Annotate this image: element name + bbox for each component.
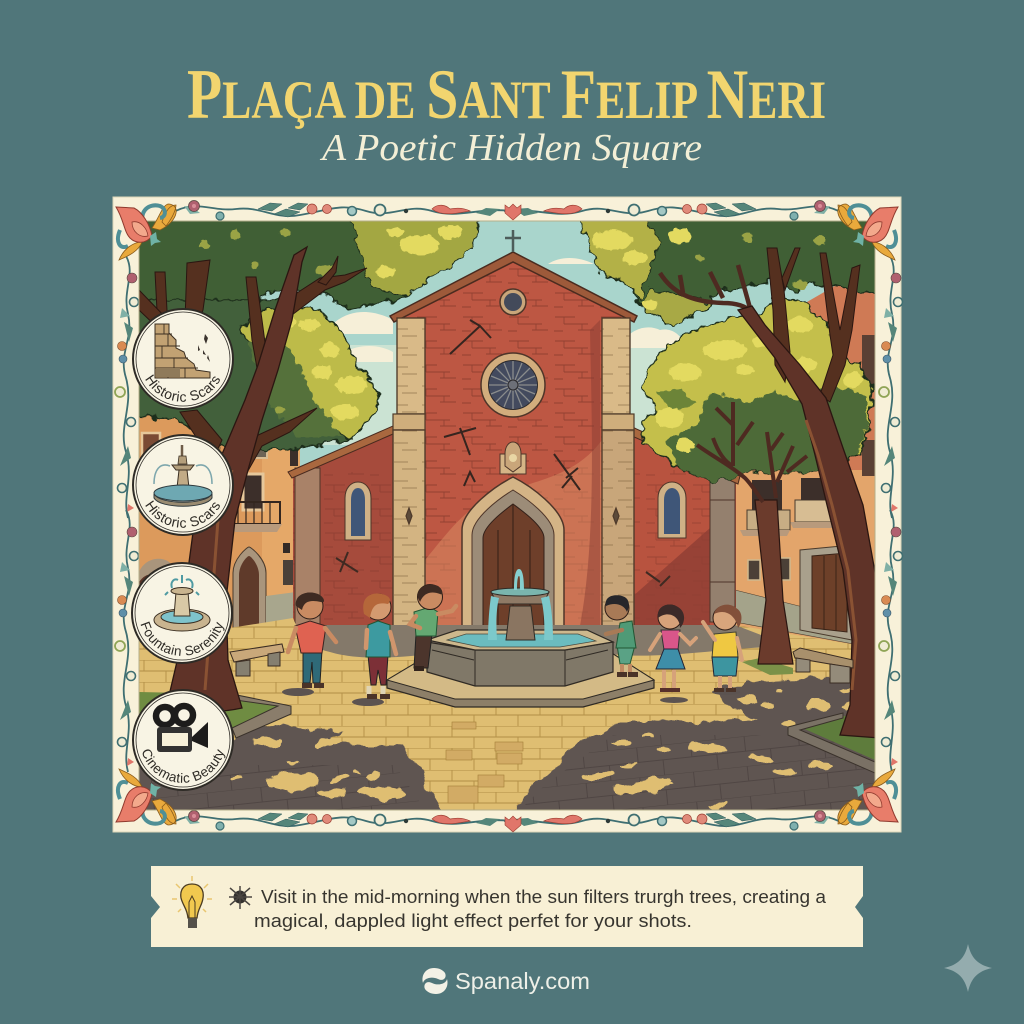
church: crest — [500, 442, 526, 474]
label: cinematic beauty: Cinematic Beauty — [142, 749, 226, 783]
brand: Spanaly — [422, 968, 590, 994]
child: green shirt — [410, 584, 456, 671]
church — [288, 230, 740, 626]
child: teal shirt — [352, 594, 396, 706]
medallion: fountain one — [132, 434, 234, 536]
icon: movie camera — [156, 706, 208, 752]
church: wall scars — [444, 320, 580, 490]
medallion: historic scars — [132, 308, 234, 410]
canopy: top left dark — [140, 222, 480, 310]
medallion: cinematic beauty — [132, 689, 234, 791]
buildings: left — [139, 415, 300, 640]
child: yellow shirt — [703, 605, 742, 695]
child: red shirt — [282, 592, 336, 696]
trees: canopies — [130, 215, 880, 482]
canopy: right yellow tree — [640, 298, 873, 482]
church: stone pilasters — [393, 318, 634, 626]
fountain: water jets — [514, 569, 524, 590]
child: pink shirt — [650, 604, 696, 703]
child: green shirt right — [605, 595, 638, 677]
tree: left large trunk — [139, 247, 367, 711]
label: historic scars repeated: Historic Scars — [145, 500, 220, 528]
fountain: water pool — [447, 634, 596, 647]
bench: right — [793, 648, 853, 683]
tip text — [254, 887, 827, 931]
icon: brand swirl — [422, 968, 448, 994]
label: fountain serenity: Fountain Serenity — [140, 622, 225, 656]
border ornament: corner flowers — [116, 204, 898, 825]
tip banner — [151, 866, 863, 947]
fountain — [387, 569, 654, 707]
church: cross — [505, 230, 521, 252]
church: rose window — [481, 353, 545, 417]
icon: sparkle star — [944, 944, 992, 992]
tip text: Visit in the mid-morning when the sun filters trurgh trees, creating a — [261, 887, 827, 907]
planter: left grass bed — [139, 692, 291, 738]
church: right aisle — [630, 426, 740, 626]
icon: stone fountain — [154, 575, 210, 631]
icon: blue fountain — [154, 445, 212, 506]
canopy: left yellow tree — [240, 305, 378, 440]
church: main facade — [398, 256, 630, 626]
title: PLAÇA DE SANT FELIP NERI — [187, 56, 826, 134]
canopy: top right dark — [578, 215, 880, 326]
church: oculus — [500, 289, 526, 315]
canopy: top right olive — [578, 215, 660, 300]
ground: tree shadows — [130, 678, 880, 815]
subtitle: A Poetic Hidden Square — [319, 127, 702, 169]
sky and clouds — [260, 222, 834, 466]
fountain: lower step — [387, 652, 654, 707]
fountain: basin — [427, 642, 613, 686]
canopy: left lower dark — [130, 300, 352, 450]
church: roof gable — [390, 252, 637, 322]
tree: right small trunk — [697, 402, 807, 664]
panel: illustrated frame — [112, 196, 904, 832]
illustration: the square — [130, 215, 880, 815]
church: arched portal — [462, 477, 564, 626]
icon: light bulb — [172, 876, 212, 928]
border ornament: vines — [115, 200, 902, 832]
church: left aisle — [288, 426, 393, 626]
tip text: magical, dappled light effect perfet for your shots. — [254, 911, 692, 931]
frame border background — [113, 197, 901, 832]
icon: ornament — [229, 886, 252, 909]
poster canvas — [112, 70, 992, 994]
buildings: right — [735, 280, 875, 648]
inner frame line — [139, 221, 875, 810]
brand name: Spanaly.com — [455, 968, 590, 994]
planter: right grass bed — [742, 658, 875, 773]
bench: left — [230, 644, 284, 676]
banner ribbon — [151, 866, 863, 947]
label: historic scars: Historic Scars — [145, 374, 220, 402]
canopy: top left olive — [350, 215, 480, 295]
tree: right large trunk — [660, 248, 880, 738]
icon: crumbling brick wall — [155, 324, 210, 378]
ground: plaza — [139, 618, 875, 810]
medallion: fountain serenity — [131, 562, 233, 664]
fountain: pedestal and bowl — [506, 606, 535, 640]
